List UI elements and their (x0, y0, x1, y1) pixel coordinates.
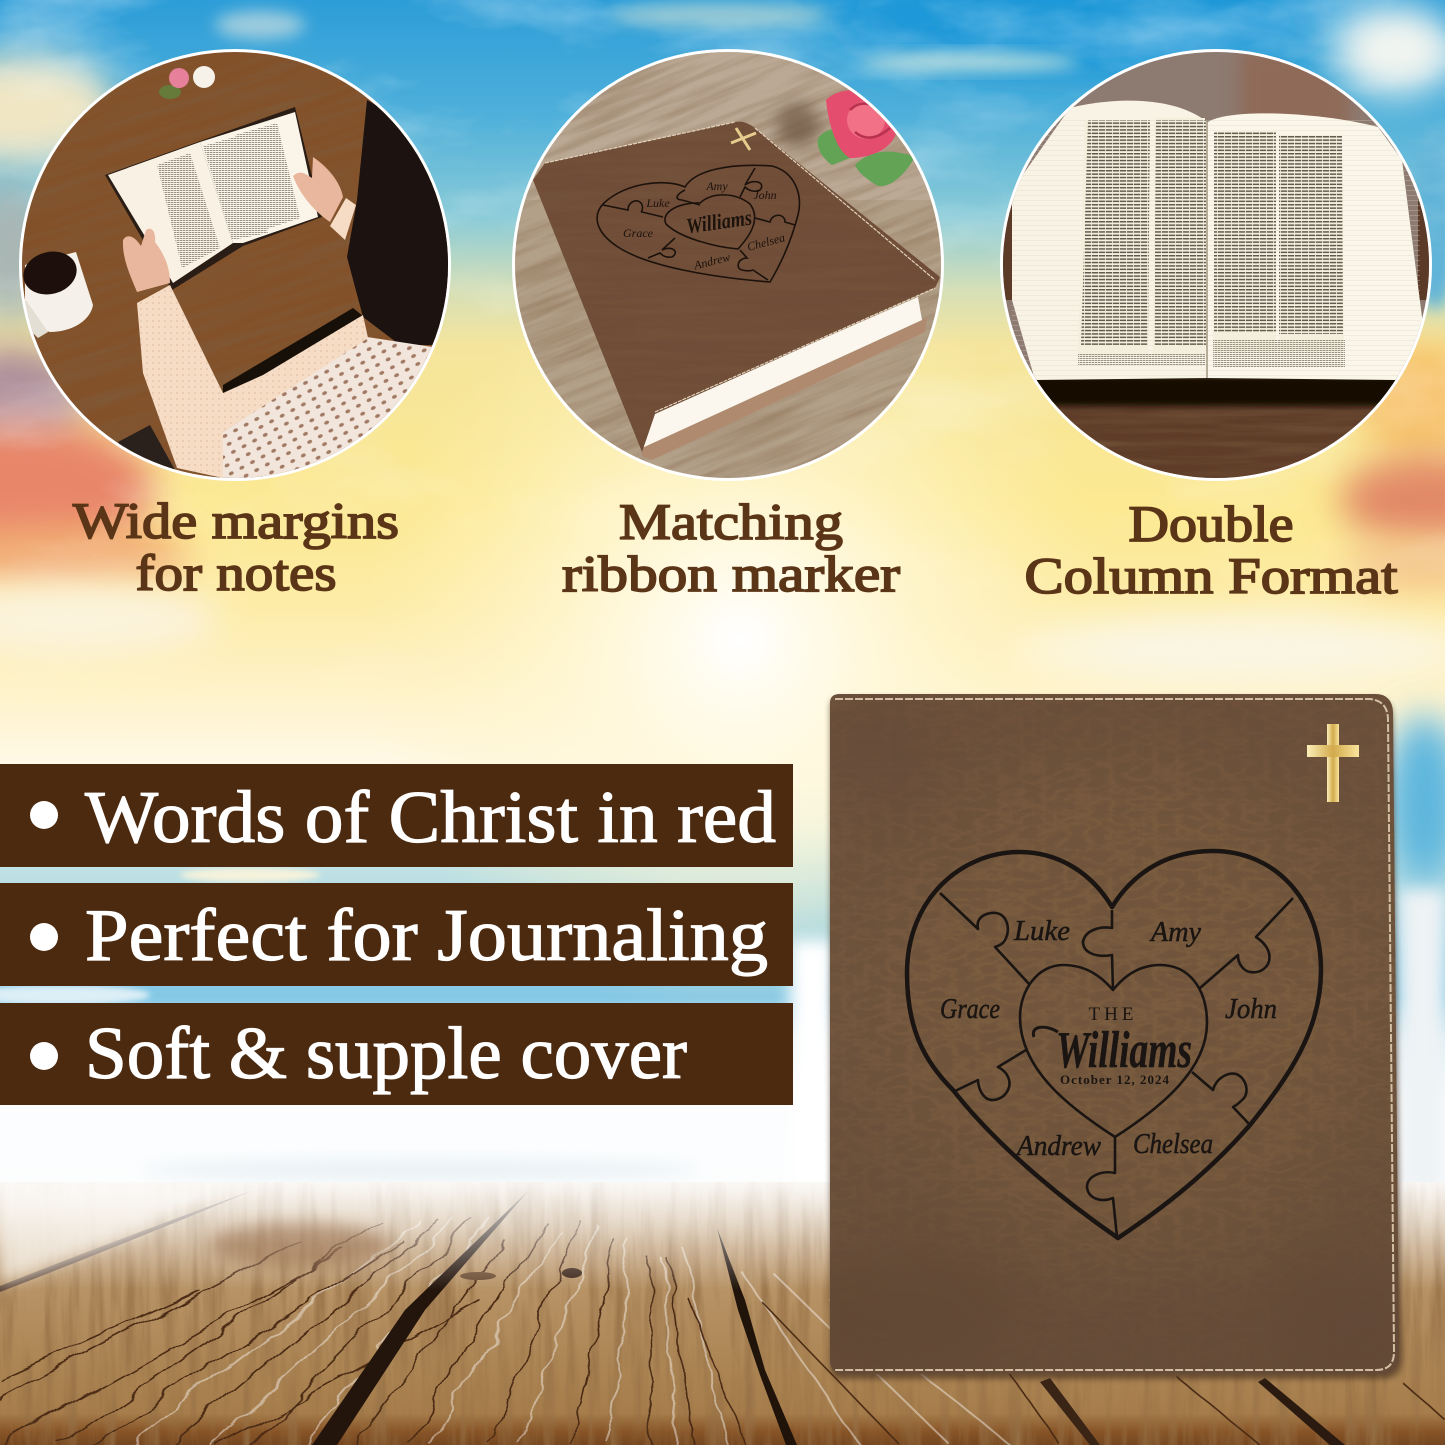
engraved names: October 12, 2024 (1060, 1072, 1170, 1087)
book cover (533, 122, 940, 452)
photo circle: leather book with ribbon: Chelsea (745, 230, 786, 254)
engraved names: Amy (1149, 916, 1201, 948)
sweater arm (137, 285, 368, 478)
caption line 2: wide margins for notes: for notes (136, 546, 336, 602)
rose (818, 129, 915, 186)
feature banner: perfect for journaling: Perfect for Journaling (85, 895, 768, 977)
cover stitching (835, 699, 1394, 1370)
right page (1207, 113, 1424, 380)
engraved names (940, 915, 1277, 1162)
caption: matching ribbon marker: Matching (619, 495, 843, 551)
caption line 2: double column format: Column Format (1024, 549, 1398, 605)
feature banner: words of Christ in red (0, 764, 793, 867)
engraved names: Grace (940, 993, 1000, 1025)
small heart engraving (597, 165, 799, 282)
lace back of sweater (223, 337, 432, 478)
wooden deck foreground (0, 1175, 1445, 1445)
rose shadow (776, 103, 820, 147)
engraved names: Andrew (1015, 1130, 1102, 1162)
desk edge (223, 308, 363, 400)
photo circle: leather book with ribbon: Luke (645, 196, 670, 210)
photo circle: leather book with ribbon: Amy (705, 179, 728, 193)
caption line 2: matching ribbon marker: ribbon marker (562, 547, 900, 603)
photo circle: leather book with ribbon: Andrew (691, 250, 732, 273)
flowers (159, 85, 181, 99)
hair (347, 100, 452, 345)
leather bible cover (790, 692, 1420, 1380)
photo circle: open bible double column (1000, 49, 1435, 481)
photo circle: leather book with ribbon: Williams (685, 205, 753, 239)
book edge (642, 318, 927, 460)
mug (25, 252, 93, 332)
feature banner: soft and supple cover: Soft & supple cover (85, 1013, 687, 1095)
engraved names: John (1225, 993, 1277, 1025)
engraved names: Williams (1056, 1022, 1192, 1079)
caption: wide margins for notes: Wide margins (73, 494, 399, 550)
feature banner: soft and supple cover (0, 1003, 793, 1105)
feature banner: words of Christ in red: Words of Christ in red (85, 777, 776, 859)
photo circle: leather book with ribbon (512, 49, 944, 481)
engraved names: THE (1089, 1004, 1137, 1025)
engraved names: Luke (1013, 915, 1070, 947)
feature banner: perfect for journaling (0, 883, 793, 986)
engraved names: Chelsea (1133, 1128, 1213, 1160)
photo circle: leather book with ribbon: John (753, 188, 777, 202)
icon: gold cross (1307, 724, 1359, 802)
hands (123, 229, 170, 292)
book (105, 107, 322, 290)
left page (1012, 101, 1207, 380)
caption: double column format: Double (1128, 497, 1294, 553)
photo circle: reading at wooden desk (19, 49, 451, 481)
photo circle: leather book with ribbon: Grace (623, 226, 654, 240)
puzzle heart engraving (907, 851, 1321, 1238)
